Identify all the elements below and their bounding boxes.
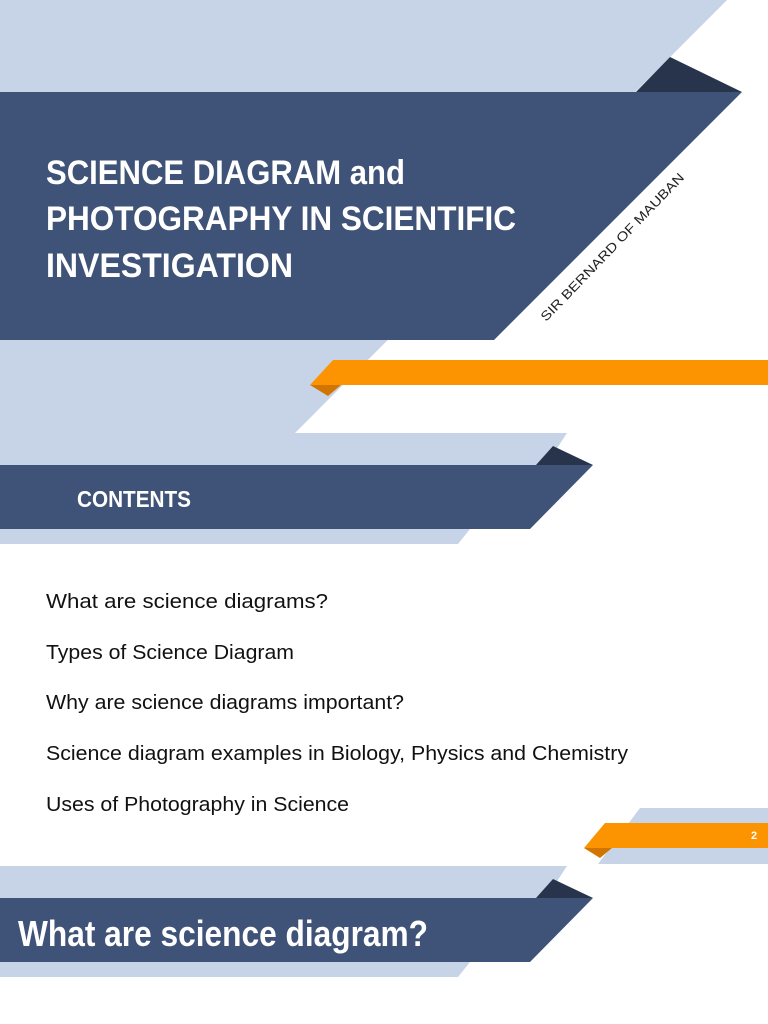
- title: [46, 154, 516, 285]
- light band bottom: [0, 962, 470, 977]
- title: PHOTOGRAPHY IN SCIENTIFIC: [46, 200, 516, 238]
- orange fold: [310, 385, 341, 396]
- dark title band: [0, 92, 742, 340]
- panel: section slide: [0, 866, 593, 977]
- dark fold triangle: [536, 879, 593, 898]
- section heading: What are science diagram?: [18, 913, 428, 954]
- page number tab: 2: [751, 830, 757, 842]
- author rotated text: SIR BERNARD OF MAUBAN: [537, 170, 687, 324]
- page number tab: [584, 808, 768, 864]
- orange bar: [310, 360, 768, 385]
- light band top: [0, 433, 567, 465]
- dark contents band: [0, 465, 593, 529]
- panel: contents slide: [0, 433, 768, 864]
- contents list: Types of Science Diagram: [46, 642, 294, 664]
- contents list: Science diagram examples in Biology, Physics and Chemistry: [46, 743, 628, 765]
- contents list: [46, 591, 628, 816]
- dark band: [0, 898, 593, 962]
- contents list: Uses of Photography in Science: [46, 794, 349, 816]
- contents list: What are science diagrams?: [46, 591, 328, 613]
- dark fold triangle: [636, 57, 742, 92]
- light band bottom: [0, 529, 470, 544]
- dark fold triangle: [536, 446, 593, 465]
- title: INVESTIGATION: [46, 247, 293, 285]
- contents list: Why are science diagrams important?: [46, 692, 404, 714]
- panel: title slide: [0, 0, 768, 433]
- light band top: [0, 866, 567, 898]
- title: SCIENCE DIAGRAM and: [46, 154, 405, 192]
- light background shape: [0, 0, 727, 433]
- contents heading: CONTENTS: [77, 486, 191, 512]
